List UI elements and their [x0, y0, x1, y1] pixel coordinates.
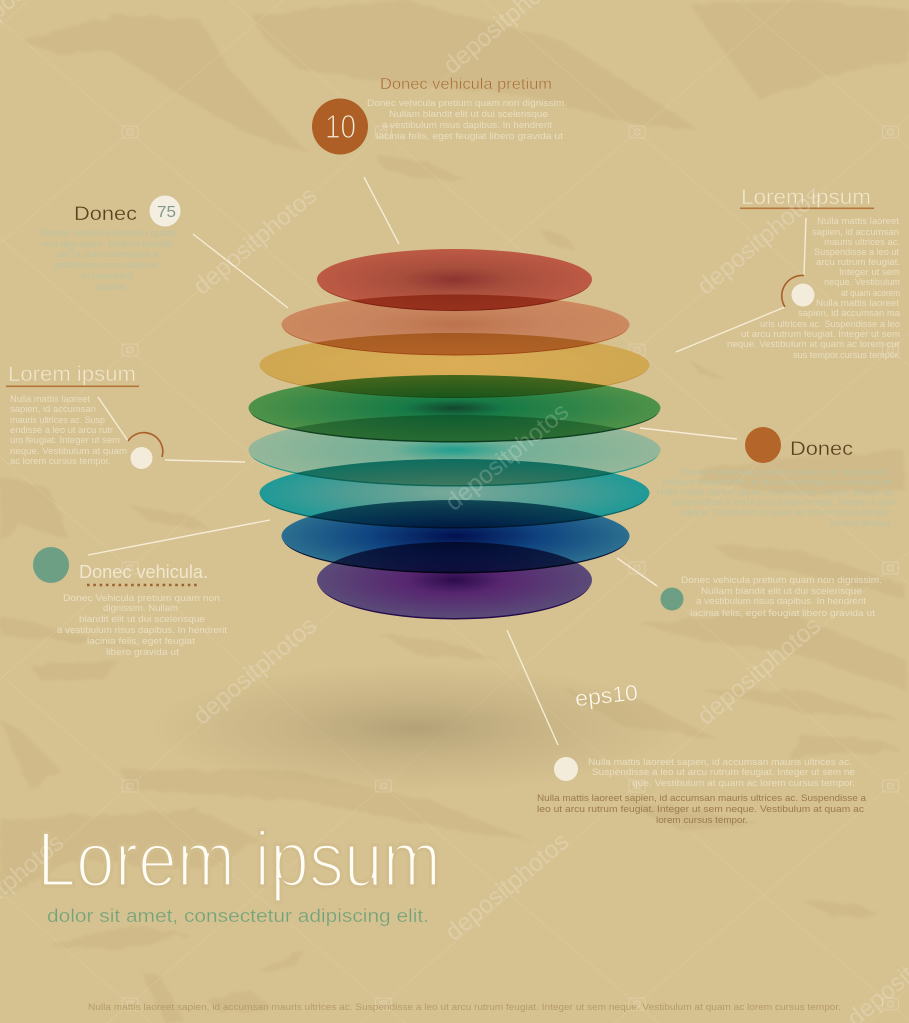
text block: dark: leo ut arcu rutrum feugiat. Integer ut sem neque. Vestibulum at quam ac — [537, 804, 864, 815]
eps10 mark: eps10 — [574, 680, 639, 711]
panel: right Lorem ipsum — [727, 186, 901, 361]
text block: lacinia — [95, 282, 126, 293]
text block: Nulla mattis laoreet — [816, 298, 899, 309]
dotted rule — [87, 584, 200, 586]
heading: Donec vehicula. — [79, 561, 208, 582]
icon: cream dot — [554, 757, 578, 781]
watermarks: depositphotos — [692, 611, 826, 731]
text block: Nullam blandit elit ut dui scelerisque a vestibulum — [662, 477, 893, 488]
text block: Integer ut sem — [839, 267, 900, 278]
disc: yellow — [260, 333, 650, 398]
heading underline — [740, 208, 874, 209]
text block: sapien, id accumsan ma — [798, 308, 901, 319]
heading: Lorem ipsum — [741, 186, 871, 209]
text block: arcu rutrum feugiat. — [816, 257, 900, 268]
text block: uris ultrices ac. Suspendisse a leo — [760, 319, 900, 330]
text block: sapien, id accumsan — [812, 227, 899, 238]
heading: Donec vehicula pretium — [380, 76, 552, 93]
text block: neque. Vestibulum at quam ac lorem cursus tempor. — [682, 507, 893, 518]
watermarks: depositphotos — [440, 827, 574, 947]
text block — [367, 98, 567, 142]
text block: elit ut dui scelerisque a — [57, 249, 160, 260]
text block: at quam acorem — [841, 288, 900, 299]
text block: neque. Vestibulum at quam — [10, 446, 127, 457]
text block: Nullam blandit elit ut dui scelerisque — [701, 586, 862, 597]
badge: 75 — [150, 196, 180, 226]
text block: neque. Vestibulum — [824, 277, 900, 288]
text block: Nulla mattis laoreet sapien, id accumsan mauris ultrices ac. — [657, 487, 895, 498]
watermarks: depositphotos — [188, 181, 322, 301]
title: Lorem ipsum — [37, 815, 441, 903]
text block: light: Nulla mattis laoreet sapien, id accumsan mauris ultrices ac. — [588, 757, 852, 768]
text block: lacinia felis, eget feugiat libero gravida ut — [690, 608, 875, 619]
text block: dark: Nulla mattis laoreet sapien, id accumsan mauris ultrices ac. Suspendisse a — [537, 793, 867, 804]
text block: lacinia felis, eget feugiat libero gravida ut — [376, 131, 563, 142]
text block: cursus tempor. — [830, 518, 893, 529]
text block: Suspendisse a leo ut arcu rutrum feugiat. Integer ut sem — [672, 497, 895, 508]
watermarks: depositphotos — [692, 181, 826, 301]
text block: Nulla mattis laoreet — [817, 216, 899, 227]
text block — [681, 575, 882, 619]
text block: vestibulum risus dapibus. — [53, 260, 161, 271]
disc: light teal — [248, 415, 660, 486]
disc: red — [317, 249, 592, 311]
watermarks: depositphotos — [188, 611, 322, 731]
text block: a vestibulum risus dapibus. In hendrerit — [382, 120, 552, 131]
text block: Donec vehicula pretium quam non dignissim. — [680, 467, 890, 478]
icon: dot with arc — [128, 433, 163, 469]
text block: sus tempor.cursus tempor. — [793, 350, 900, 361]
text block: light — [588, 757, 855, 789]
text block: light: que. Vestibulum at quam ac lorem cursus tempor. — [632, 778, 855, 789]
icon: green circle — [33, 547, 69, 583]
text block: Suspendisse a leo ut — [814, 247, 899, 258]
text block: Donec vehicula pretium quam — [40, 228, 176, 239]
panel: left Lorem ipsum — [6, 363, 163, 469]
text block: blandit elit ut dui scelerisque — [79, 614, 205, 625]
text block: a vestibulum risus dapibus. In hendrerit — [696, 596, 866, 607]
text block: a vestibulum risus dapibus. In hendrerit — [57, 625, 227, 636]
heading: Donec — [74, 203, 137, 225]
text block — [40, 228, 176, 293]
text block: sapien, id accumsan — [10, 404, 96, 415]
heading: Lorem ipsum — [8, 363, 136, 386]
text block: lacinia felis, eget feugiat — [87, 636, 195, 647]
panel: right Donec — [657, 427, 895, 529]
text block: Donec vehicula pretium quam non dignissim. — [681, 575, 882, 586]
text block — [657, 467, 895, 529]
text block: dark: lorem cursus tempor. — [656, 815, 748, 826]
text block: Donec vehicula pretium quam non dignissim. — [367, 98, 567, 109]
text block: Donec Vehicula pretium quam non — [63, 593, 220, 604]
text block: um feugiat. Integer ut sem — [10, 435, 120, 446]
disc: green — [248, 375, 660, 442]
text block: neque. Vestibulum at quam ac lorem cur — [727, 339, 900, 350]
disc: navy — [282, 500, 630, 574]
footer text: Nulla mattis laoreet sapien, id accumsan mauris ultrices ac. Suspendisse a leo ut arcu rutrum feugiat. Integer ut sem neque. Vestibulum at quam ac lorem cursus tempor. — [88, 1002, 841, 1013]
panel: right small green note — [660, 575, 882, 619]
badge: 10: 10 — [325, 108, 356, 145]
text block: light: Suspendisse a leo ut arcu rutrum feugiat. Integer ut sem ne — [592, 767, 855, 778]
text block: ac lorem cursus tempor. — [10, 456, 111, 467]
watermarks: depositphotos — [440, 397, 574, 517]
text block — [10, 394, 127, 467]
text block: Nulla mattis laoreet — [10, 394, 90, 405]
text block — [57, 593, 227, 658]
text block: Nullam blandit elit ut dui scelerisque — [389, 109, 548, 120]
text block: non dignissim. Nullam blandit — [41, 239, 172, 250]
icon: dot with arc — [782, 275, 814, 307]
heading underline — [6, 386, 139, 387]
floor shadow — [150, 664, 680, 792]
text block: dignissim. Nullam — [103, 603, 178, 614]
text block: dark — [537, 793, 867, 826]
disc: purple — [317, 542, 592, 620]
badge: 75: 75 — [157, 204, 176, 221]
subtitle: dolor sit amet, consectetur adipiscing elit. — [47, 906, 429, 926]
text block: In hendrerit — [81, 271, 133, 282]
panel: left Donec vehicula — [33, 547, 227, 658]
panel: top callout 10 — [312, 76, 567, 154]
connector lines — [88, 177, 806, 745]
text block: mauris ultrices ac. Susp — [10, 415, 105, 426]
heading: Donec — [790, 438, 853, 460]
icon: green dot — [660, 588, 684, 610]
stacked disc sphere chart — [248, 249, 660, 620]
disc: orange — [282, 294, 630, 356]
text block — [727, 216, 901, 361]
panel: Donec 75 — [40, 196, 180, 293]
icon: brown circle — [745, 427, 781, 463]
text block: endisse a leo ut arcu rutr — [10, 425, 113, 436]
disc: teal — [260, 459, 650, 528]
badge: 10 — [312, 98, 368, 154]
text block: ut arcu rutrum feugiat. Integer ut sem — [741, 329, 900, 340]
text block: mauris ultrices ac. — [824, 237, 900, 248]
panel: bottom note — [537, 757, 867, 826]
text block: libero gravida ut — [106, 647, 179, 658]
